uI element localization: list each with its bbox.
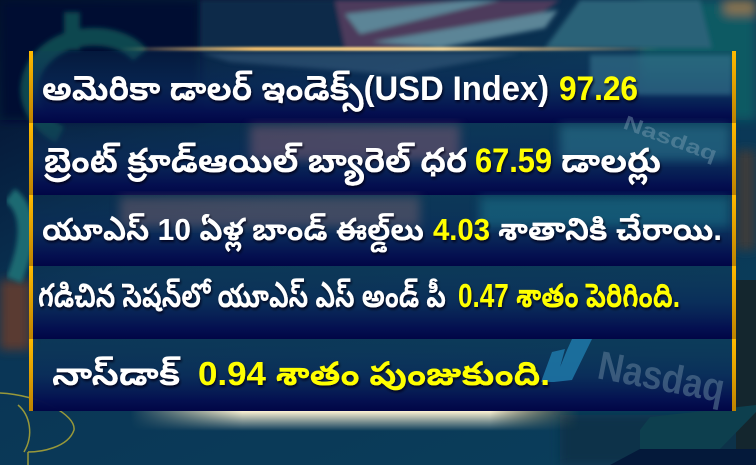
nasdaq sign in background: Nasdaq — [620, 112, 720, 166]
text: brent crude: బ్రెంట్ క్రూడ్ఆయిల్ బ్యారెల్ ధర — [44, 142, 468, 186]
icon: nasdaq logo mark — [541, 339, 592, 382]
right gold bar — [732, 51, 736, 411]
text: treasury yield: శాతానికి చేరాయి. — [498, 212, 722, 247]
text: s&p 500: గడిచిన సెషన్‌లో యూఎస్ ఎస్ అండ్ పీ — [38, 277, 446, 314]
text: treasury yield: యూఎస్ 10 ఏళ్ల బాండ్ ఈల్డ్‌లు — [42, 212, 424, 253]
left gold bar — [29, 51, 33, 411]
background: dollar sign — [29, 12, 140, 135]
text: s&p 500: 0.47 శాతం పెరిగింది. — [458, 277, 680, 314]
text: dollar index: అమెరికా డాలర్ ఇండెక్స్(USD Index) — [42, 70, 549, 113]
background image detail: warm tint — [120, 197, 730, 227]
text: nasdaq gain: 0.94 శాతం పుంజుకుంది. — [198, 355, 550, 392]
text: nasdaq gain: నాస్‌డాక్ — [52, 355, 180, 392]
text: brent crude: డాలర్లు — [561, 142, 661, 186]
panel: row 5 — [33, 339, 732, 411]
panel: row 2 — [33, 112, 732, 195]
text: treasury yield: 4.03 — [433, 212, 490, 247]
nasdaq wordmark: Nasdaq — [594, 344, 728, 411]
text: dollar index: 97.26 — [559, 70, 638, 108]
panel: row 4 — [33, 266, 732, 339]
background: exchange building — [545, 0, 712, 48]
background image detail: warm flag tint — [250, 125, 730, 160]
panel: row 3 — [33, 195, 732, 266]
background: lower coin icon — [0, 393, 74, 465]
background: lower dollar sign — [10, 195, 26, 280]
background: american flag — [200, 0, 560, 50]
glow line: top — [120, 47, 660, 51]
panel: row 1 — [33, 51, 732, 123]
text: brent crude: 67.59 — [475, 142, 552, 180]
glow: bottom — [130, 411, 580, 431]
background image detail: building and flag — [200, 53, 732, 95]
